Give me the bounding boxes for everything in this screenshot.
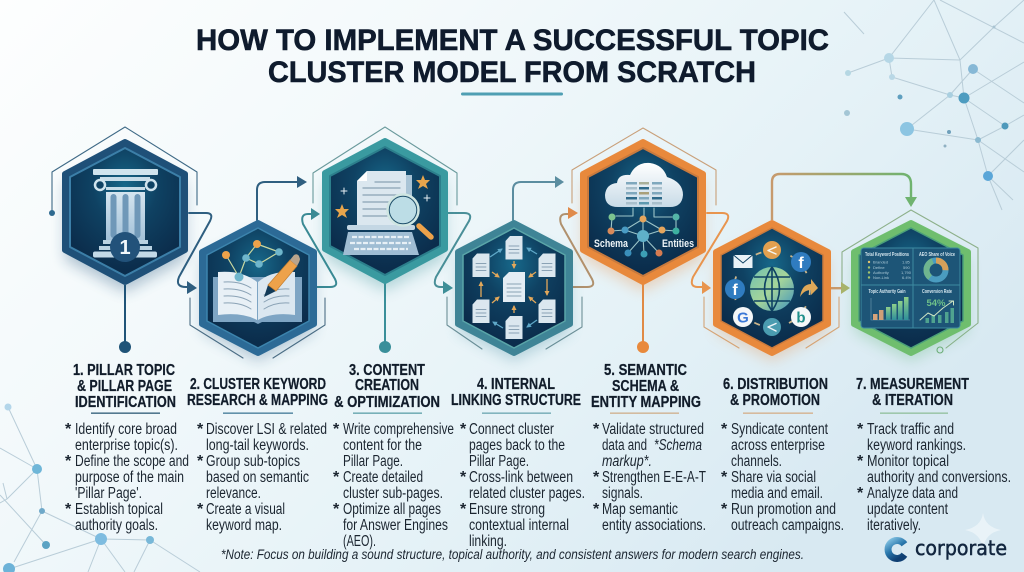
step 6 text: * [721,469,728,486]
step 6 heading [723,376,828,414]
step 3 text: cluster sub-pages. [343,485,443,502]
panel: step 7 hexagon [854,223,968,361]
step 5 heading: 5. SEMANTIC [604,362,687,379]
step 1 text: enterprise topic(s). [75,437,178,454]
step 6 text: Syndicate content [731,421,829,438]
step 3 heading: CREATION [355,377,419,394]
step 3 text: * [333,421,340,438]
step 1 heading: 1. PILLAR TOPIC [73,362,175,379]
step 2 text [197,421,327,534]
step 1 text: Identify core broad [75,421,177,438]
icon: globe with social channels: b [796,310,806,326]
arrow: step 2 up to step 3 [257,176,307,220]
step 5 text: * [593,469,600,486]
drop line and dot: step 1 [119,285,131,353]
step 3 text: * [333,501,340,518]
step 3 text: content for the [343,437,422,454]
step 2 text: Discover LSI & related [206,421,327,438]
drop line and dot: step 5 [637,283,649,353]
step 2 text: * [197,421,204,438]
panel: step 6 hexagon [716,223,828,361]
step 4 text: * [460,421,467,438]
step 7 text: * [857,485,864,502]
step 6 text: across enterprise [731,437,825,454]
arrow: step 4 up to step 5 [513,176,564,220]
step 6 text: outreach campaigns. [731,517,844,534]
icon: pillar [93,169,158,262]
panel: step 5 hexagon [583,142,703,291]
logo: corporate: corporate [915,536,1007,560]
step 5 text: data and [602,437,647,454]
step 5 text: Strengthen E-E-A-T [602,469,706,486]
chart: dashboard: Branded [873,260,888,264]
decorative sparkle [965,513,1001,549]
step 6 heading: & PROMOTION [730,392,820,409]
step 7 text: Monitor topical [867,453,949,470]
chart: dashboard: Conversion Rate [922,289,952,295]
arrow: step 6 to step 7 lower [831,282,850,294]
step 5 text: signals. [602,485,643,502]
step 1 text: Define the scope and [75,453,189,470]
step 5 heading: ENTITY MAPPING [591,394,701,411]
step 6 text: Run promotion and [731,501,836,518]
step 1 heading: & PILLAR PAGE [77,378,172,395]
step 1 text: Establish topical [75,501,163,518]
icon: globe with social channels: f [732,282,738,299]
step 3 text: Write comprehensive [343,421,454,438]
title [196,24,829,89]
icon: globe with social channels [725,241,818,336]
icon: document, magnifier, laptop [335,171,431,255]
step 4 text: pages back to the [469,437,565,454]
step 4 text: * [460,469,467,486]
chart: dashboard: Total Keyword Positions [865,252,909,258]
step 6 text: Share via social [731,469,816,486]
step 5 text: *Schema [654,437,702,454]
step 4 text: * [460,501,467,518]
step 6 text: channels. [731,453,782,470]
step 2 heading: RESEARCH & MAPPING [187,392,328,409]
panel: step 2 hexagon [202,223,314,361]
step 3 text: Optimize all pages [343,501,441,518]
step 5 text: Validate structured [602,421,704,438]
step 1 text: 'Pillar Page'. [75,485,142,502]
chart: dashboard: 1,790 [901,270,912,275]
arrow: step 3 to step 4 [435,213,470,294]
chart: dashboard: 590 [903,265,910,270]
step 6 text: media and email. [731,485,823,502]
step 6 text: * [721,501,728,518]
step 4 heading: LINKING STRUCTURE [451,392,581,409]
step 4 text: contextual internal [469,517,569,534]
step 3 heading [334,362,440,414]
chart: dashboard: Authority [873,270,889,275]
step 7 heading [856,376,969,414]
step 5 text: Map semantic [602,501,678,518]
icon: open book with keyword graph [213,240,302,324]
step 2 text: Group sub-topics [206,453,300,470]
step 4 heading: 4. INTERNAL [477,376,555,393]
step 7 text: * [857,453,864,470]
panel: step 3 hexagon [325,141,445,291]
step 6 text [721,421,844,534]
chart: dashboard: Non-Link [873,275,889,280]
step 2 text: Create a visual [206,501,285,518]
step 5 text: markup*. [602,453,652,470]
chart: dashboard [861,248,960,328]
step 5 heading: SCHEMA & [612,378,679,395]
step 4 heading [451,376,581,414]
step 1 text: * [65,421,72,438]
footnote: *Note: Focus on building a sound structure, topical authority, and consistent answers for modern search engines. [221,547,804,562]
chart: dashboard: Define [873,265,885,270]
step 7 text: keyword rankings. [867,437,966,454]
step 7 text [857,421,1011,534]
step 3 text: Pillar Page. [343,453,403,470]
panel: step 4 hexagon [458,223,570,361]
step 1 text: purpose of the main [75,469,184,486]
icon: schema cloud and entity graph: Schema [594,238,629,250]
step 4 text [460,421,585,550]
step 7 heading: 7. MEASUREMENT [856,376,969,393]
arrow: step 1 to step 2 [178,213,211,294]
step 6 heading: 6. DISTRIBUTION [723,376,828,393]
drop line and dot: step 3 [379,283,391,353]
title: CLUSTER MODEL FROM SCRATCH [268,56,756,89]
step 2 text: * [197,453,204,470]
step 4 text: related cluster pages. [469,485,585,502]
step 3 heading: 3. CONTENT [349,362,425,379]
title: HOW TO IMPLEMENT A SUCCESSFUL TOPIC [196,24,829,57]
step 1 text: * [65,453,72,470]
step 4 text: linking. [469,533,507,550]
panel: step 1 hexagon [65,142,185,292]
step 7 text: Track traffic and [867,421,954,438]
step 1 heading [73,362,176,414]
step 3 text: * [333,469,340,486]
arrow: step 5 to step 6 [692,213,728,294]
step 1 text: * [65,501,72,518]
step 2 heading [187,376,328,414]
step 2 text: keyword map. [206,517,282,534]
icon: linked documents [472,236,556,339]
step 7 text: * [857,421,864,438]
step 7 text: Analyze data and [867,485,958,502]
step 2 heading: 2. CLUSTER KEYWORD [190,376,326,393]
step 5 text [593,421,706,534]
step 5 heading [591,362,701,414]
title underline [461,92,563,96]
chart: dashboard: 54% [926,298,946,309]
step 4 text: Pillar Page. [469,453,529,470]
outline brackets [49,127,978,358]
step 2 text: relevance. [206,485,261,502]
step 1 heading: IDENTIFICATION [75,394,176,411]
step 3 heading: & OPTIMIZATION [334,394,440,411]
step 2 text: based on semantic [206,469,309,486]
arrow: step 4 lower to step 5 [560,207,593,287]
arrow: step 2 lower to step 3 [302,208,336,287]
icon: schema cloud and entity graph: Entities [662,238,694,250]
chart: dashboard: 6.4% [902,275,912,280]
step 7 text: update content [867,501,949,518]
icon: globe with social channels: G [737,310,749,326]
step 5 text: * [593,421,600,438]
icon: schema cloud and entity graph [594,163,694,258]
step 4 text: Cross-link between [469,469,573,486]
step 5 text: * [593,501,600,518]
arrow: step 6 up to step 7 [772,174,917,220]
step 4 text: Ensure strong [469,501,545,518]
step 7 text: iteratively. [867,517,921,534]
step 3 text: (AEO). [343,533,376,550]
icon: pillar: 1 [119,237,131,259]
icon: globe with social channels: f [798,255,804,272]
step 3 text: Create detailed [343,469,423,486]
chart: dashboard: 1.85 [902,260,911,264]
network decoration: bottom left [0,404,200,572]
step 6 text: * [721,421,728,438]
step 3 text [333,421,454,550]
step 1 text: authority goals. [75,517,158,534]
step 5 text: entity associations. [602,517,706,534]
step 2 text: * [197,501,204,518]
step 4 text: Connect cluster [469,421,554,438]
chart: dashboard: AEO Share of Voice [919,252,955,258]
step 2 text: long-tail keywords. [206,437,309,454]
step 3 text: for Answer Engines [343,517,448,534]
step 7 heading: & ITERATION [872,392,953,409]
network decoration: top right [844,0,1024,210]
chart: dashboard: Topic Authority Gain [868,289,906,295]
step 1 text [65,421,189,534]
